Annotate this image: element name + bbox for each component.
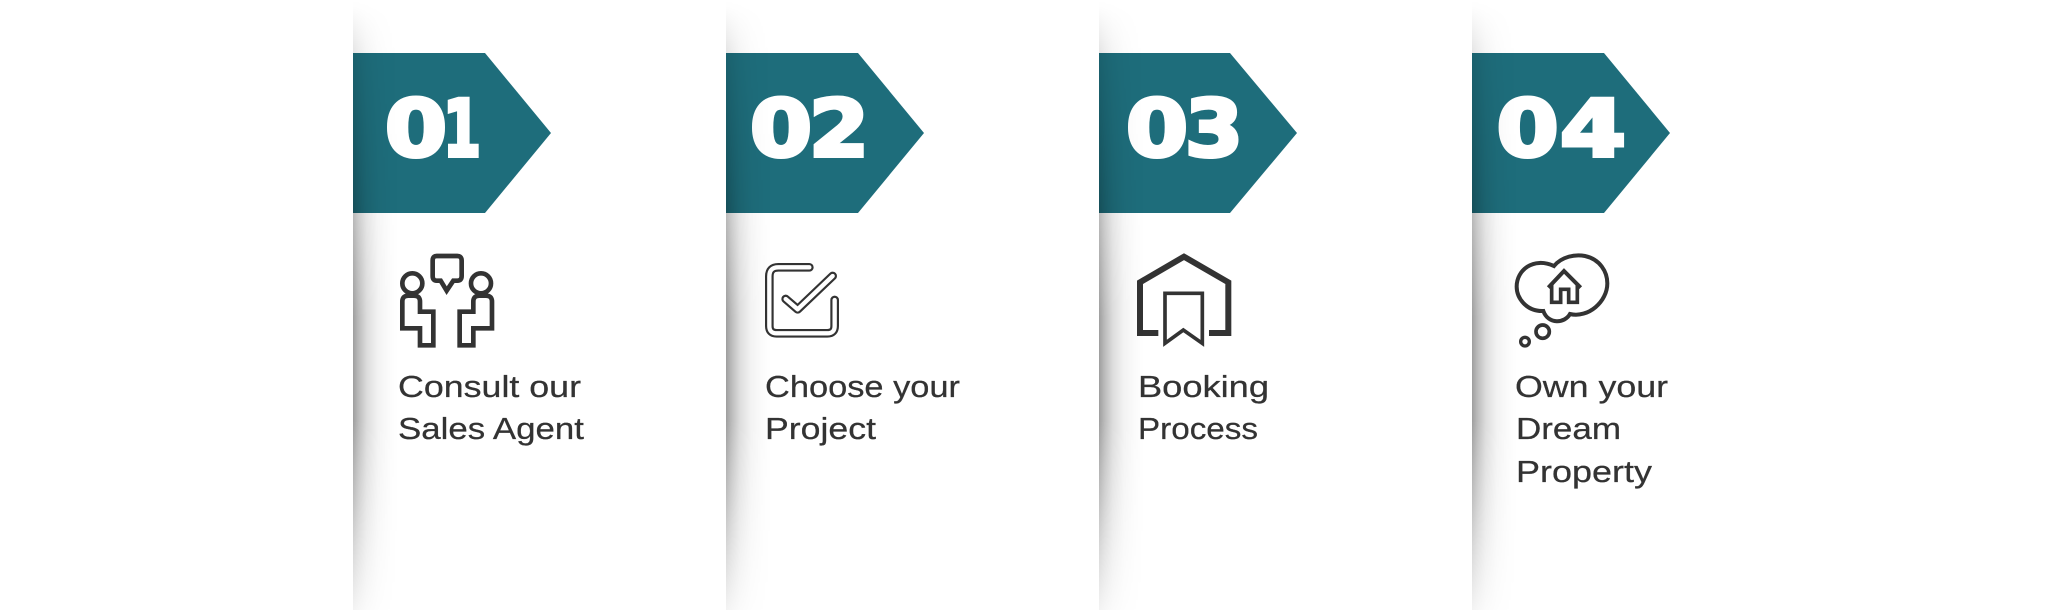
ribbon: step 3 bbox=[1099, 53, 1297, 213]
number: 02 bbox=[750, 85, 869, 175]
label: Consult our Sales Agent bbox=[398, 369, 584, 446]
panel: step 3 booking bbox=[1099, 53, 1297, 446]
label: Choose your Project: Project bbox=[765, 411, 876, 446]
icon: thought cloud with house bbox=[1517, 255, 1607, 346]
ribbon: step 1 bbox=[353, 53, 551, 213]
label: Choose your Project bbox=[765, 369, 960, 446]
label: Own your Dream Property bbox=[1515, 369, 1668, 489]
icon: two people talking bbox=[402, 256, 492, 345]
number: 02: 2 bbox=[809, 85, 869, 175]
number: 04: 4 bbox=[1560, 85, 1626, 175]
label: Own your Dream Property: Own your bbox=[1515, 369, 1668, 404]
number: 01: 0 bbox=[385, 85, 447, 175]
number: 01: 1 bbox=[443, 85, 481, 175]
label: Choose your Project: Choose your bbox=[765, 369, 960, 404]
panel: step 4 own bbox=[1472, 53, 1670, 489]
ribbon: step 2 bbox=[726, 53, 924, 213]
number: 01 bbox=[385, 85, 481, 175]
label: Own your Dream Property: Dream bbox=[1516, 411, 1621, 446]
icon: checkbox bbox=[769, 267, 835, 333]
number: 03: 0 bbox=[1126, 85, 1188, 175]
number: 04: 0 bbox=[1497, 85, 1559, 175]
number: 04 bbox=[1497, 85, 1626, 175]
panel: step 2 choose bbox=[726, 53, 960, 446]
number: 03: 3 bbox=[1185, 85, 1243, 175]
label: Own your Dream Property: Property bbox=[1516, 454, 1653, 489]
icon: house with bookmark bbox=[1140, 257, 1228, 343]
label: Booking Process: Process bbox=[1138, 411, 1258, 446]
panel: step 1 consult bbox=[353, 53, 584, 446]
label: Consult our Sales Agent: Sales Agent bbox=[398, 411, 584, 446]
label: Booking Process bbox=[1138, 369, 1269, 446]
ribbon: step 4 bbox=[1472, 53, 1670, 213]
number: 03 bbox=[1126, 85, 1243, 175]
label: Booking Process: Booking bbox=[1138, 369, 1269, 404]
number: 02: 0 bbox=[750, 85, 812, 175]
label: Consult our Sales Agent: Consult our bbox=[398, 369, 581, 404]
